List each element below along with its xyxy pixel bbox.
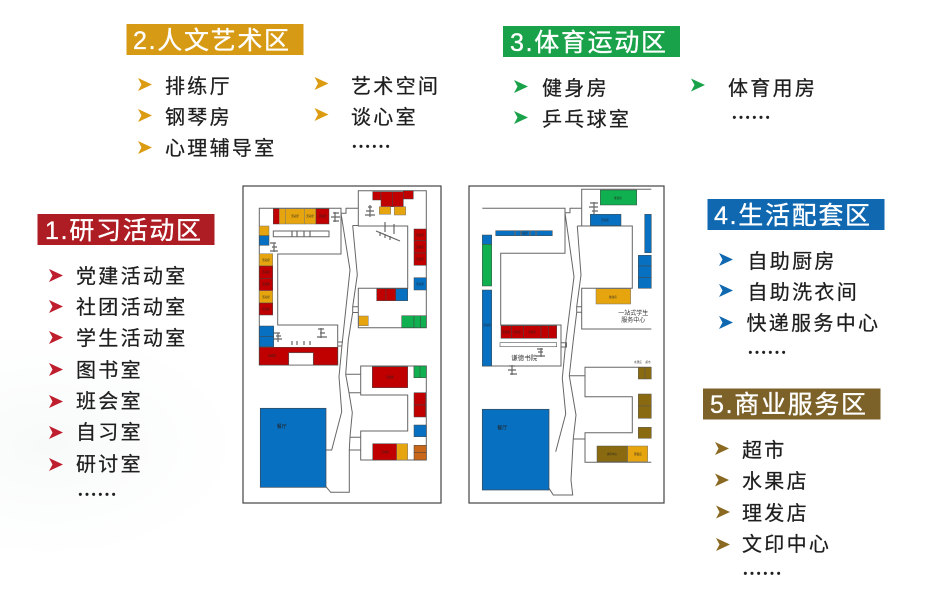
list: living rooms: …… xyxy=(747,337,787,366)
label: one-stop student service center: 一站式学生 xyxy=(618,309,648,317)
rooms: upper right block: 健身房 xyxy=(614,196,622,200)
rooms: red row: 活动室 xyxy=(513,330,521,334)
heading: 1.研习活动区: 1.研习活动区 xyxy=(45,217,203,245)
room: lower hall xyxy=(259,347,338,365)
walls: corridors xyxy=(326,213,358,492)
rooms: left column: 活动室 xyxy=(262,295,270,299)
rooms: lower right block xyxy=(372,366,426,460)
list: living rooms xyxy=(719,250,880,366)
icons: stairs xyxy=(270,205,400,345)
panel: 5 commercial services zone xyxy=(703,388,880,587)
list: sports rooms: …… xyxy=(731,102,771,131)
rooms: lower right block: 文印中心 xyxy=(607,452,618,456)
rooms: left column: 活动室 xyxy=(262,270,270,274)
rooms: upper right block: 活动室 xyxy=(416,257,424,261)
list: sports rooms: 体育用房 xyxy=(728,77,817,100)
rooms: left column: 活动室 xyxy=(262,307,270,311)
list: study rooms: …… xyxy=(77,479,117,508)
list: sports rooms: 乒乓球室 xyxy=(542,108,631,131)
list: commercial rooms: 水果店 xyxy=(742,470,809,493)
heading: 3.体育运动区: 3.体育运动区 xyxy=(510,29,668,57)
rooms: red row: 活动室 xyxy=(502,330,510,334)
rooms: left column xyxy=(259,226,274,347)
room: canteen xyxy=(482,409,549,490)
rooms: upper right block: 活动室 xyxy=(601,218,609,222)
list: commercial rooms: 文印中心 xyxy=(742,533,831,556)
walls: right lower block xyxy=(346,366,426,460)
list: sports rooms: 健身房 xyxy=(542,77,609,100)
rooms: upper right block xyxy=(359,191,426,328)
room: canteen: 餐厅 xyxy=(497,424,507,432)
floor plan: right map xyxy=(469,186,664,503)
room: canteen xyxy=(260,408,326,487)
panel: 2 humanities and arts zone xyxy=(126,24,440,160)
list: study rooms: 研讨室 xyxy=(76,453,143,476)
list: study rooms xyxy=(49,265,188,508)
list: arts rooms: 谈心室 xyxy=(351,106,418,129)
map frame xyxy=(469,186,664,503)
walls: right upper block xyxy=(358,191,426,328)
heading: 5.商业服务区: 5.商业服务区 xyxy=(710,391,868,419)
walls: right lower block xyxy=(569,367,651,462)
list: sports rooms xyxy=(514,77,817,131)
list: living rooms: 自助厨房 xyxy=(748,250,837,273)
map frame xyxy=(243,186,441,503)
list: living rooms: 自助洗衣间 xyxy=(748,281,859,304)
list: arts rooms: 排练厅 xyxy=(165,75,232,98)
heading: 4.生活配套区: 4.生活配套区 xyxy=(714,202,872,230)
walls: left building xyxy=(482,208,582,366)
rooms: left column: 活动室 xyxy=(262,258,270,262)
rooms: lower right block: 理发店 xyxy=(634,452,642,456)
heading: 2.人文艺术区: 2.人文艺术区 xyxy=(133,27,291,55)
list: commercial rooms: 理发店 xyxy=(742,502,809,525)
list: commercial rooms: …… xyxy=(742,558,782,587)
rooms: top corridor: 活动室 xyxy=(319,214,327,218)
list: study rooms: 社团活动室 xyxy=(76,296,188,319)
rooms: red row xyxy=(500,326,557,347)
walls: right upper block xyxy=(582,189,651,329)
room: lower hall: 活动室 xyxy=(268,354,276,358)
list: arts rooms: 艺术空间 xyxy=(351,75,440,98)
panel: 1 study activity zone xyxy=(38,214,214,508)
rooms: lower right block: 活动室 xyxy=(381,450,389,454)
list: arts rooms: 心理辅导室 xyxy=(165,137,276,160)
walls: corridors xyxy=(549,213,582,495)
rooms: left column: 活动室 xyxy=(483,323,491,327)
list: study rooms: 学生活动室 xyxy=(76,327,188,350)
rooms: top corridor: 活动室 xyxy=(291,214,299,218)
list: study rooms: 班会室 xyxy=(76,390,143,413)
rooms: lower right block: 超市 xyxy=(645,360,651,364)
rooms: upper right block: 活动室 xyxy=(416,282,424,286)
rooms: lower right block xyxy=(597,360,651,462)
rooms: top corridor xyxy=(273,209,329,237)
list: study rooms: 党建活动室 xyxy=(76,265,188,288)
list: study rooms: 图书室 xyxy=(76,359,143,382)
icons: stairs xyxy=(508,202,598,375)
list: commercial rooms: 超市 xyxy=(742,439,787,462)
rooms: left column xyxy=(482,231,552,366)
floor plan: left map xyxy=(243,186,441,503)
rooms: left column: 活动室 xyxy=(520,231,528,235)
rooms: lower right block: 水果店 xyxy=(634,360,642,364)
panel: 3 sports zone xyxy=(503,26,817,131)
room: canteen: 餐厅 xyxy=(277,423,287,430)
rooms: upper right block: 健身房 xyxy=(609,295,617,299)
rooms: left column: 活动室 xyxy=(262,282,270,286)
rooms: upper right block xyxy=(590,190,651,304)
panel: 4 living services zone xyxy=(708,199,884,366)
list: arts rooms: 钢琴房 xyxy=(165,106,232,129)
list: arts rooms: …… xyxy=(351,131,391,160)
list: living rooms: 快递服务中心 xyxy=(746,312,880,335)
rooms: upper right block: 活动室 xyxy=(416,233,424,237)
rooms: top corridor: 活动室 xyxy=(306,214,314,218)
label: service center second line: 服务中心 xyxy=(621,316,645,324)
list: study rooms: 自习室 xyxy=(76,421,143,444)
walls: left building xyxy=(259,208,358,365)
rooms: red row: 活动室 xyxy=(528,330,536,334)
list: commercial rooms xyxy=(715,439,831,587)
rooms: upper right block: 活动室 xyxy=(416,245,424,249)
label: academy: 谦德书院 xyxy=(511,353,538,362)
list: arts rooms xyxy=(138,75,440,160)
rooms: lower right block: 活动室 xyxy=(386,375,394,379)
